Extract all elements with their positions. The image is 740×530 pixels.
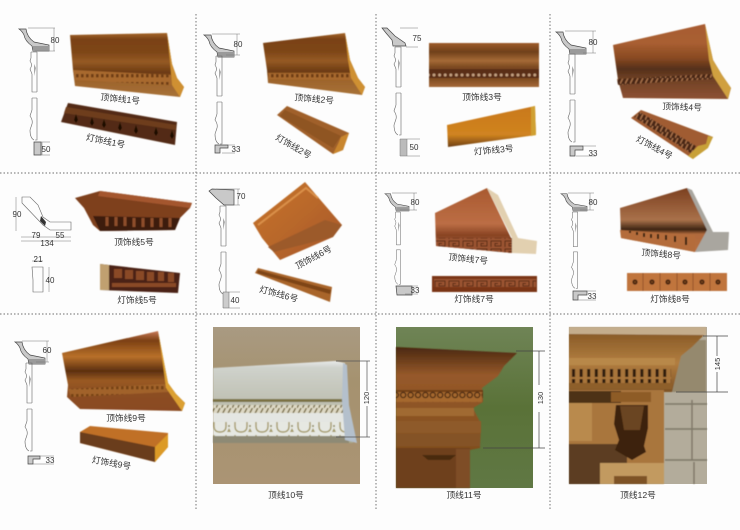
- panel: 顶饰线4号 / 灯饰线4号: [556, 24, 731, 161]
- dimension 130: [483, 351, 545, 448]
- panel: 顶饰线7号 / 灯饰线7号: [385, 188, 537, 304]
- product: crown moulding 1: [70, 33, 184, 97]
- profile drawing 2: [204, 34, 243, 154]
- label 顶饰线5号: 顶饰线5号: [114, 236, 154, 247]
- label 灯饰线2号: 灯饰线2号: [274, 131, 314, 161]
- product: crown moulding 2: [263, 33, 365, 95]
- profile drawing 8: 80: [589, 198, 598, 207]
- photo background: [213, 327, 360, 484]
- stone wall: [569, 327, 707, 484]
- panel: 顶饰线2号 / 灯饰线2号: [204, 33, 365, 161]
- label 顶线11号: 顶线11号: [446, 489, 482, 500]
- panel: 顶饰线3号 / 灯饰线3号: [382, 28, 539, 157]
- product: lamp moulding 3: [447, 106, 536, 147]
- wood mantel and corbel: [569, 327, 707, 484]
- label 灯饰线1号: 灯饰线1号: [85, 131, 127, 150]
- dimension 145: [676, 336, 728, 392]
- profile drawing 1: 50: [42, 145, 51, 154]
- green wall: [396, 327, 533, 488]
- product: crown moulding 4: [613, 24, 731, 99]
- label 灯饰线5号: 灯饰线5号: [117, 294, 157, 305]
- label 顶饰线2号: 顶饰线2号: [294, 91, 335, 106]
- label 灯饰线8号: 灯饰线8号: [650, 293, 690, 304]
- dimension 120: [336, 361, 371, 437]
- product: crown moulding 5: [75, 191, 192, 231]
- profile drawing 9: 60: [43, 346, 52, 355]
- product: lamp moulding 6: [255, 268, 332, 302]
- label 顶饰线4号: 顶饰线4号: [662, 100, 702, 113]
- panel: 顶饰线8号 / 灯饰线8号: [561, 188, 729, 304]
- profile drawing 7: 33: [411, 286, 420, 295]
- label 顶饰线1号: 顶饰线1号: [100, 91, 141, 106]
- profile drawing 4: 33: [589, 149, 598, 158]
- profile drawing 5: [13, 197, 71, 292]
- product: crown moulding 3: [429, 43, 539, 87]
- white moulding: [213, 361, 357, 443]
- panel: 顶饰线5号 / 灯饰线5号: [13, 191, 192, 305]
- profile drawing 1: [19, 28, 60, 155]
- profile drawing 5: 79: [32, 231, 41, 240]
- label 顶饰线7号: 顶饰线7号: [448, 251, 489, 266]
- panel: 顶饰线6号 / 灯饰线6号: [209, 182, 342, 308]
- profile drawing 8: [561, 193, 598, 301]
- product: crown moulding 7: [435, 188, 537, 254]
- profile drawing 5: 21: [34, 255, 43, 264]
- profile drawing 5: 40: [46, 276, 55, 285]
- profile drawing 7: [385, 193, 420, 295]
- product: lamp moulding 2: [277, 106, 349, 154]
- profile drawing 6: 40: [231, 296, 240, 305]
- label 顶饰线6号: 顶饰线6号: [293, 243, 334, 271]
- product: lamp moulding 5: [100, 264, 180, 293]
- product: lamp moulding 9: [80, 426, 168, 462]
- profile drawing 2: 80: [234, 40, 243, 49]
- panel: 顶线11号 photo: [396, 327, 545, 488]
- panel: 顶饰线1号 / 灯饰线1号: [19, 28, 184, 155]
- profile drawing 3: 75: [413, 34, 422, 43]
- profile drawing 9: [15, 341, 55, 465]
- product: crown moulding 8: [620, 188, 729, 252]
- profile drawing 9: 33: [46, 456, 55, 465]
- product: crown moulding 6: [253, 182, 342, 260]
- product: lamp moulding 8: [627, 273, 727, 291]
- dimension 145: 145: [713, 358, 722, 370]
- label 灯饰线4号: 灯饰线4号: [635, 133, 675, 161]
- profile drawing 4: 80: [589, 38, 598, 47]
- profile drawing 2: 33: [232, 145, 241, 154]
- product: lamp moulding 4: [631, 110, 713, 159]
- profile drawing 1: 80: [51, 36, 60, 45]
- label 顶饰线3号: 顶饰线3号: [462, 91, 502, 102]
- profile drawing 6: [209, 189, 246, 308]
- dimension 130: 130: [536, 392, 545, 404]
- label 灯饰线9号: 灯饰线9号: [91, 454, 132, 471]
- panel: 顶线10号 photo: [213, 327, 371, 484]
- panel: 顶饰线9号 / 灯饰线9号: [15, 331, 185, 471]
- profile drawing 8: 33: [588, 292, 597, 301]
- panel: 顶线12号 photo: [569, 327, 728, 484]
- label 灯饰线3号: 灯饰线3号: [473, 142, 514, 157]
- label 顶线12号: 顶线12号: [620, 489, 656, 500]
- profile drawing 7: 80: [411, 198, 420, 207]
- profile drawing 5: 55: [56, 231, 65, 240]
- profile drawing 5: 90: [13, 210, 22, 219]
- product: lamp moulding 7: [432, 276, 537, 292]
- profile drawing 6: 70: [237, 192, 246, 201]
- label 灯饰线7号: 灯饰线7号: [454, 293, 494, 304]
- profile drawing 4: [556, 31, 598, 158]
- label 顶饰线9号: 顶饰线9号: [106, 412, 146, 423]
- profile drawing 3: [382, 28, 422, 156]
- profile drawing 5: 134: [40, 239, 54, 248]
- label 顶饰线8号: 顶饰线8号: [641, 246, 682, 261]
- label 顶线10号: 顶线10号: [268, 489, 304, 500]
- label 灯饰线6号: 灯饰线6号: [258, 283, 300, 304]
- product: lamp moulding 1: [61, 103, 177, 145]
- wood moulding: [396, 347, 517, 488]
- profile drawing 3: 50: [410, 143, 419, 152]
- product: crown moulding 9: [62, 331, 185, 411]
- dimension 120: 120: [362, 392, 371, 404]
